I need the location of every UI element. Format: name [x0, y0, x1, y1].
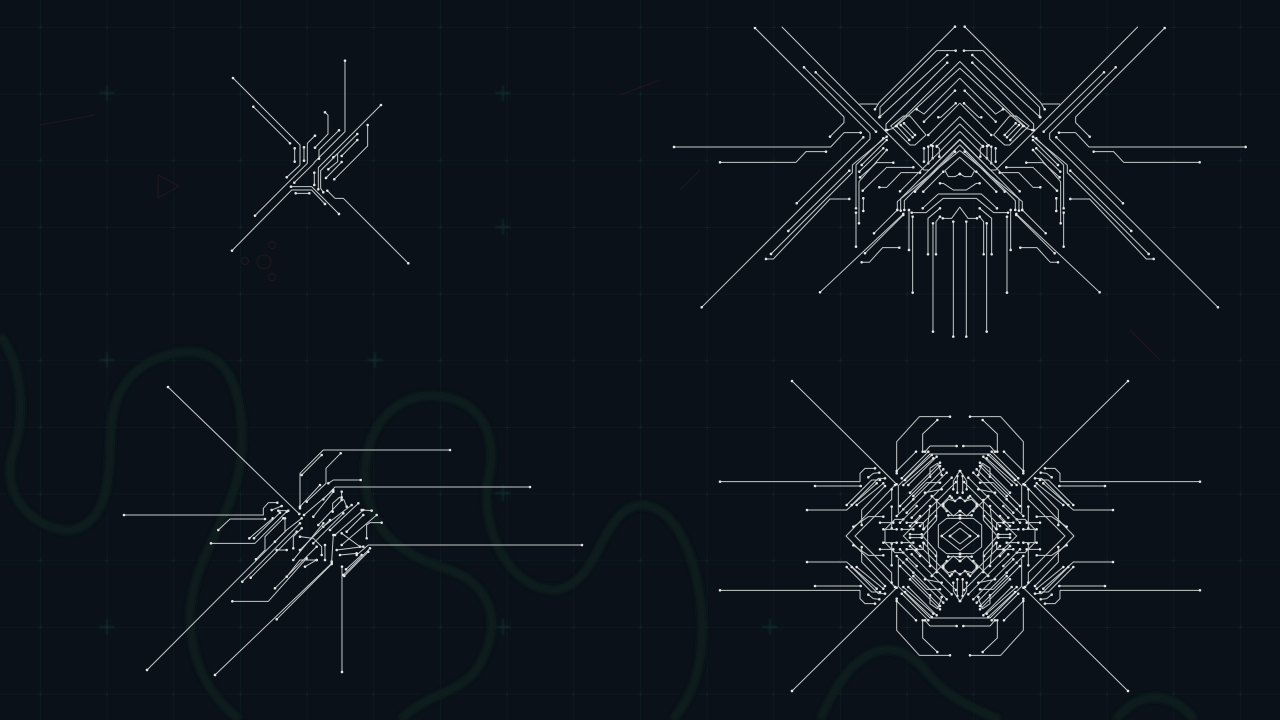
background flowing curves: [0, 335, 1195, 720]
grid highlights: [99, 85, 778, 635]
left half of symmetric trace: [674, 27, 960, 337]
icon: faint triangle: [158, 175, 179, 198]
circuit: top right: [674, 27, 1246, 337]
circuit: bottom right: [720, 381, 1200, 691]
dense hatch: [300, 485, 320, 507]
circuit: top left: [232, 61, 408, 263]
mirrored half: [960, 27, 1246, 337]
circuit: bottom left: [124, 387, 582, 675]
mirrored quadrants: [960, 381, 1200, 536]
faint red scribbles and shapes: [40, 80, 1160, 360]
quadrant of symmetric trace: [720, 381, 960, 536]
